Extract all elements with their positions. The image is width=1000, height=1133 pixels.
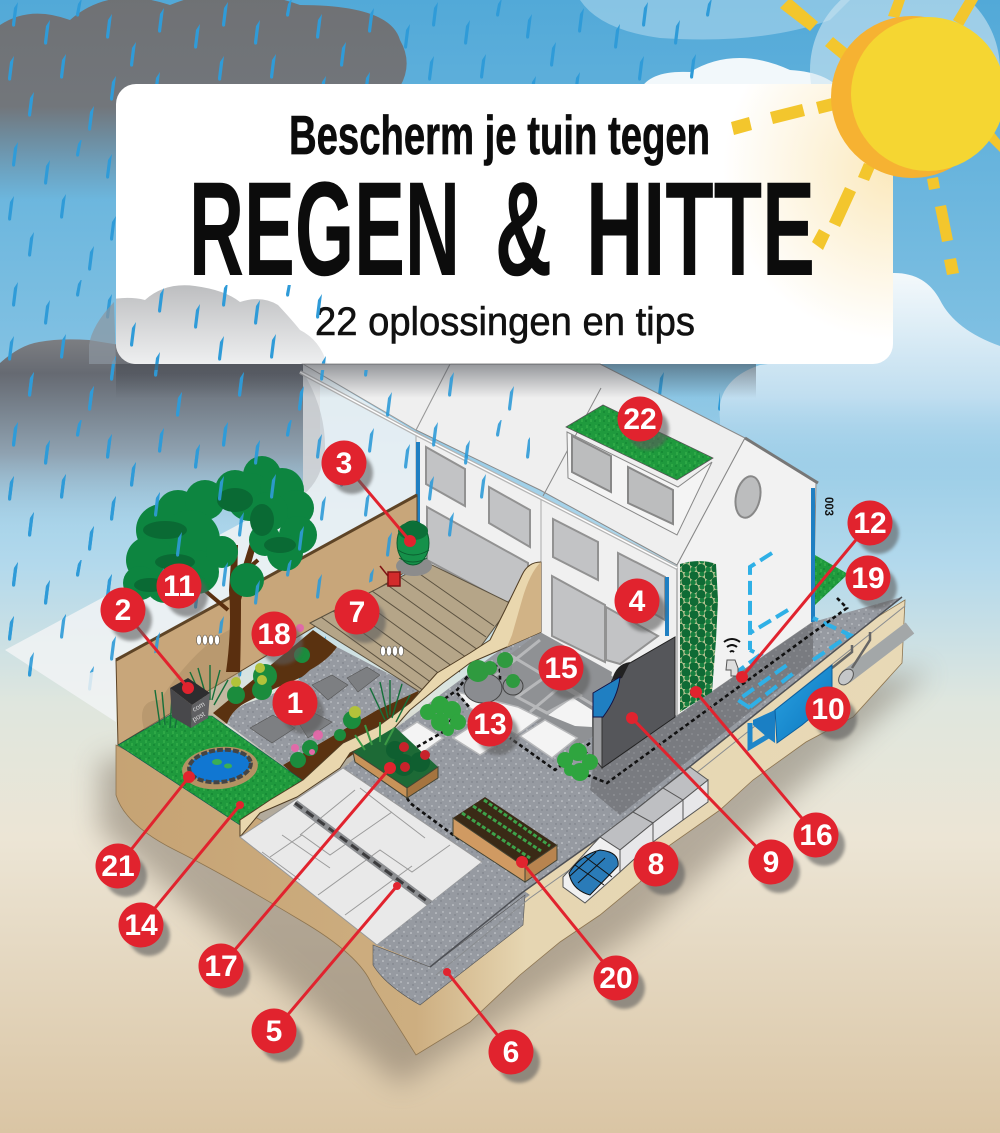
deck <box>310 563 510 692</box>
brown planting beds <box>213 630 420 782</box>
numbered badges: 3 <box>336 447 352 480</box>
dormer <box>566 405 713 535</box>
raised bed with red flowers <box>353 722 438 798</box>
numbered badges: 8 <box>648 848 664 881</box>
gabion and kerb blocks <box>563 767 708 903</box>
compost bin: post <box>192 711 207 724</box>
pond <box>180 743 260 793</box>
numbered badges: 5 <box>266 1015 282 1048</box>
numbered badges: 15 <box>544 652 578 685</box>
drain pipe <box>832 628 910 688</box>
compost bin <box>170 678 210 728</box>
grass lawn <box>118 715 302 825</box>
title panel shadow <box>116 364 756 398</box>
front pavers with drain <box>240 768 482 945</box>
house <box>300 364 836 720</box>
numbered badges <box>96 396 899 1083</box>
climbing ivy <box>680 561 718 712</box>
rain: behind title <box>0 0 720 700</box>
callout lines with dots <box>118 463 870 1052</box>
rain: over garden and house <box>0 370 530 700</box>
numbered badges: 10 <box>811 693 845 726</box>
numbered badges: 4 <box>629 585 646 618</box>
numbered badges: 13 <box>473 708 507 741</box>
numbered badges: 12 <box>853 507 887 540</box>
downspouts <box>418 442 813 636</box>
round window <box>732 474 764 520</box>
numbered badges: 6 <box>503 1036 519 1069</box>
tap with wifi <box>724 639 740 676</box>
title line 1: Bescherm je tuin tegen <box>289 104 710 166</box>
cloud: white clouds top right <box>580 0 1000 165</box>
terrace tiles <box>397 632 612 758</box>
numbered badges: 1 <box>287 687 303 720</box>
sun <box>731 0 1000 275</box>
numbered badges: 17 <box>204 950 238 983</box>
grasses and plants in beds <box>155 624 410 768</box>
cloud: light grey cloud overlapping title <box>89 285 327 364</box>
windows <box>426 447 665 664</box>
cloud: dark rain cloud top left <box>0 0 407 200</box>
cloud: grey rain cloud left <box>0 339 320 530</box>
blue dashed underground lines <box>733 553 850 708</box>
facade right <box>541 498 677 720</box>
numbered badges: 18 <box>257 618 291 651</box>
ground cover plants <box>420 696 598 781</box>
drain gutter <box>295 803 432 905</box>
garden wall <box>116 495 417 745</box>
tree <box>123 456 317 672</box>
rain barrel with watering can <box>380 521 432 586</box>
numbered badges: 14 <box>124 909 158 942</box>
retaining wall curve <box>240 562 541 837</box>
raised vegetable bed <box>453 797 557 882</box>
facade left <box>416 432 543 640</box>
compost bin: com <box>192 701 207 714</box>
rain: over title and cloud <box>115 285 340 375</box>
numbered badges: 22 <box>623 403 657 436</box>
subtitle: 22 oplossingen en tips <box>315 300 695 344</box>
front corner gravel block <box>373 597 905 1005</box>
numbered badges: 2 <box>115 594 131 627</box>
front gravel strip shadow <box>590 622 813 815</box>
garden path <box>227 647 420 765</box>
cloud: white clouds right <box>720 273 1000 480</box>
dotted cable line <box>388 598 847 840</box>
numbered badges: 19 <box>851 562 885 595</box>
gable wall <box>677 438 816 716</box>
roof <box>416 364 745 565</box>
title line 2: REGEN <box>189 155 460 304</box>
number on wall: 003 <box>822 497 836 516</box>
rain wall <box>593 637 675 768</box>
neighbouring house and garden shade <box>5 364 416 722</box>
small grass strip <box>815 555 848 605</box>
title line 2: & <box>495 155 552 304</box>
plot surface gravel <box>340 597 902 965</box>
water tank <box>750 665 832 747</box>
numbered badges: 16 <box>799 819 833 852</box>
ground block <box>116 600 905 1055</box>
ground shadow <box>100 670 930 1085</box>
numbered badges: 21 <box>101 850 135 883</box>
title line 2: HITTE <box>586 155 815 304</box>
title panel <box>116 84 893 364</box>
numbered badges: 9 <box>763 846 779 879</box>
numbered badges: 7 <box>349 596 365 629</box>
planter pots on terrace <box>464 652 523 703</box>
green roof <box>566 405 713 480</box>
numbered badges: 20 <box>599 962 633 995</box>
numbered badges: 11 <box>163 570 195 603</box>
